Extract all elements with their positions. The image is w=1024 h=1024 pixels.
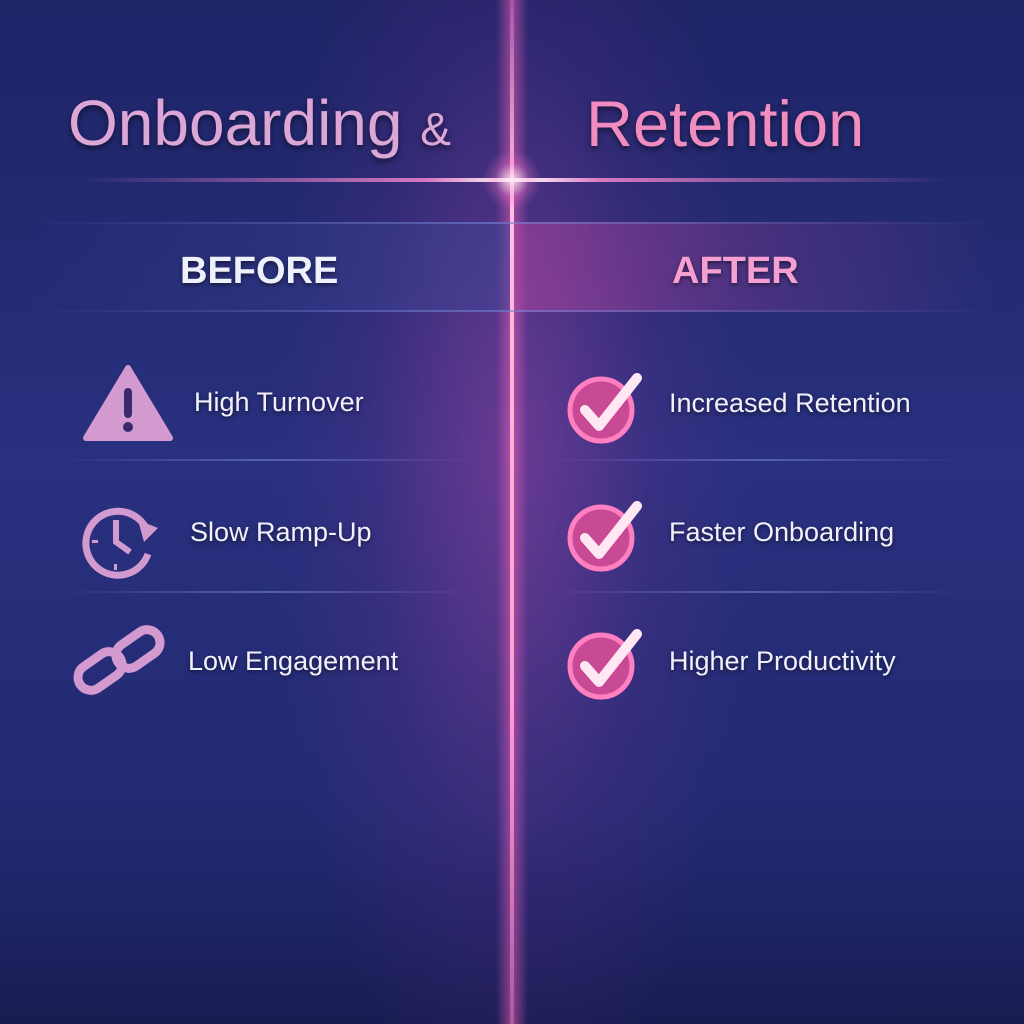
icon: check 2	[568, 501, 642, 572]
icon: clock	[82, 508, 158, 579]
text: faster onboarding: Faster Onboarding	[669, 517, 894, 547]
text: increased retention: Increased Retention	[669, 388, 911, 418]
icon: check 1	[568, 373, 642, 444]
text: slow ramp-up: Slow Ramp-Up	[190, 517, 372, 547]
title: Retention	[586, 87, 864, 160]
vertical glowing divider	[496, 0, 528, 1024]
title: Onboarding &	[68, 87, 451, 159]
icon: check 3	[568, 629, 642, 700]
text: higher productivity: Higher Productivity	[669, 646, 896, 676]
header band	[30, 222, 510, 312]
title	[68, 87, 864, 164]
icon: warning triangle	[83, 365, 173, 441]
heading: before: BEFORE	[180, 250, 338, 292]
horizontal glow line	[80, 178, 950, 182]
text: high turnover: High Turnover	[194, 387, 364, 417]
panel: before list	[74, 365, 399, 695]
text: low engagement: Low Engagement	[188, 646, 398, 676]
icon: chain link	[74, 625, 164, 695]
panel: after list	[568, 373, 912, 700]
heading: after: AFTER	[672, 250, 799, 292]
